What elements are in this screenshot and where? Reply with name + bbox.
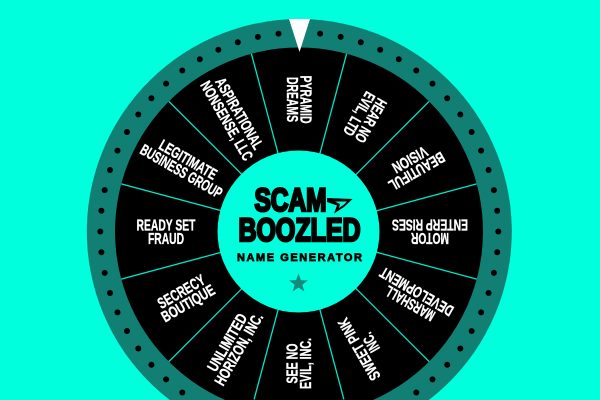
name: Sweet Pink Inc.: INC.	[359, 329, 384, 355]
wheel black face	[115, 47, 483, 400]
name: Legitimate Business Group	[137, 130, 232, 202]
center hub	[218, 150, 380, 312]
wheel outer ring	[87, 19, 512, 400]
name: Hear No Evil, Ltd	[339, 88, 390, 145]
wheel names	[136, 71, 468, 389]
name: Unlimited Horizon, Inc.: HORIZON, INC.	[212, 310, 267, 389]
name: Ready Set Fraud: FRAUD	[148, 231, 184, 248]
icon: paper plane	[327, 198, 352, 214]
name: Motor Enterp Rises	[392, 216, 468, 246]
logo: Scam Boozled: BOOZLED	[238, 212, 360, 248]
name: Motor Enterp Rises: MOTOR	[411, 229, 449, 246]
name: Marshall Development: MARSHALL	[382, 282, 438, 324]
name: Sweet Pink Inc.	[335, 307, 396, 383]
name: Aspirational Nonsense, LLC	[196, 71, 268, 164]
name: Aspirational Nonsense, LLC: NONSENSE, LLC	[196, 78, 256, 164]
name: Legitimate Business Group: LEGITIMATE	[156, 137, 220, 184]
name: Sweet Pink Inc.: SWEET PINK	[335, 314, 384, 383]
name: Marshall Development: DEVELOPMENT	[377, 263, 457, 319]
logo: Scam Boozled	[238, 182, 360, 248]
name: Beautiful Vision: BEAUTIFUL	[385, 148, 447, 194]
subtitle: name generator: NAME GENERATOR	[237, 252, 362, 264]
name: Pyramid Dreams	[283, 76, 314, 124]
logo: Scam Boozled: SCAM	[254, 182, 326, 218]
name: Motor Enterp Rises: ENTERP RISES	[392, 216, 468, 232]
name: Secrecy Boutique	[152, 270, 218, 326]
name: See No Evil, Inc.: SEE NO	[284, 344, 302, 384]
name: Marshall Development	[370, 263, 457, 331]
name: Hear No Evil, Ltd: HEAR NO	[351, 95, 390, 145]
pointer	[289, 19, 310, 52]
name: Beautiful Vision	[378, 136, 447, 194]
name: See No Evil, Inc.	[284, 338, 315, 389]
name: Unlimited Horizon, Inc.: UNLIMITED	[204, 311, 251, 375]
name: Aspirational Nonsense, LLC: ASPIRATIONAL	[211, 75, 266, 153]
icon: star	[289, 274, 308, 292]
ring dots	[97, 31, 501, 395]
name: Pyramid Dreams: PYRAMID	[296, 76, 314, 124]
name: Secrecy Boutique: BOUTIQUE	[159, 282, 218, 326]
name: Unlimited Horizon, Inc.	[200, 303, 267, 389]
name: Hear No Evil, Ltd: EVIL, LTD	[339, 88, 378, 138]
name: See No Evil, Inc.: EVIL, INC.	[298, 338, 315, 389]
name: Ready Set Fraud	[136, 218, 196, 248]
name: Pyramid Dreams: DREAMS	[283, 77, 300, 122]
name: Legitimate Business Group: BUSINESS GROUP	[137, 142, 225, 202]
name: Secrecy Boutique: SECRECY	[155, 272, 209, 313]
name: Beautiful Vision: VISION	[389, 142, 430, 176]
name: Ready Set Fraud: READY SET	[136, 218, 196, 234]
